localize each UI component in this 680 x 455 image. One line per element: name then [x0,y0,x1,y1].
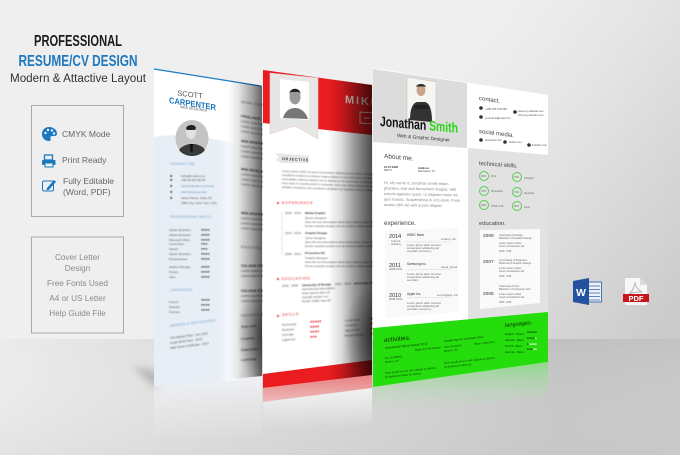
activities block: Proin iaculis arcu in nisl volutpat et ultricies [444,356,496,365]
contact block: +158 785 678 568 [485,107,507,111]
sidebar text: ●●● [201,242,208,246]
education text: Bachelor of Graphic Design [499,236,532,240]
experience text: 2008-2010 [389,297,403,301]
experience section [277,201,381,268]
sidebar text: hello@email.com [181,174,205,178]
experience section: Here the text description area lorem ipsum dolor sit amet [305,260,381,264]
photo: scott [176,120,208,156]
sidebar text: ● [170,183,173,188]
experience text: sed diam nonummy [407,307,432,311]
education text: Amet consectetur elit [499,269,524,273]
experience section: Junior Designer [305,236,326,240]
skills section: Illustrator [282,327,294,332]
education text: 2009 [483,233,494,239]
right column text: PERSONAL SKILLS [241,312,273,318]
technical skills: 75% [514,176,520,179]
experience text: consectetur adipiscing elit [407,304,439,308]
reflection: documents [132,362,548,440]
about section: Address [418,166,430,170]
sidebar text: 2550 City, New York, USA [181,201,218,205]
sidebar text: /www.linkedin.com/scott [181,184,214,188]
technical skills: technical skills. [479,161,518,170]
panel: extras [32,237,124,333]
activities block: Paper Craft Drive [474,340,495,346]
right column text: Lorem ipsum dolor [241,221,268,227]
right column text [241,100,279,362]
about section: Hi, My name is Jonathan Smith etiam [384,180,448,186]
technical skills: 60% [481,204,487,207]
about section [384,153,460,208]
icon: pdf: PDF [628,294,644,303]
skills section: Lightroom [282,337,296,342]
sidebar text: Sketch [169,247,179,251]
education text: Bachelor of Computer Arts [499,287,531,291]
objective text [282,169,390,193]
experience section: Graphic Designer [305,256,328,260]
skills section: Photoshop [282,322,297,327]
activities block: Leadership for volunteer 2015 [444,335,484,343]
sidebar text: Great Work Prize - 2015 [170,337,202,345]
skills section: ●●●●● [370,326,381,331]
name block [169,88,216,113]
activities block: activities. [384,335,411,344]
sidebar text: PROFESSIONAL SKILLS [170,215,212,219]
education section: suscipit semper orci [302,294,329,299]
sidebar text: LANGUAGES [170,288,193,292]
activities block: Boston, US [444,348,458,353]
education text [483,233,532,304]
sidebar text: Microsoft Office [169,238,190,242]
shadow on blue page [232,82,262,379]
sidebar text: AWARDS & CERTIFICATES [170,318,216,328]
activities block: mi eleifend at tellus vel ultrices [385,371,422,379]
sidebar text: Spanish [169,305,180,309]
experience text: Seoul, Korea [441,265,458,269]
experience text: 2010 [389,293,401,299]
sidebar text: ● [170,189,173,194]
photo: mike [280,79,309,120]
experience section: Here the text description area lorem ipsum dolor sit amet [305,220,381,224]
sidebar text: Adobe Illustrator [169,233,191,237]
blue top line [154,69,261,86]
text: extras list: Free Fonts Used [47,279,108,288]
languages block: ●●●●● [527,336,537,340]
experience section: Senior Designer [305,216,327,220]
education text: Amet consectetur elit [499,295,524,299]
sidebar text: Java [169,275,176,279]
technical skills: Corel [524,206,530,209]
activities block: Boston, US [385,359,399,364]
sidebar text: ● [170,173,173,178]
name: mike: MIKE [345,94,380,109]
languages block: German - Basic [505,350,524,354]
right column text: Lorem ipsum dolor sit [241,226,272,232]
education heading: education. [479,221,506,227]
contact block: www.my-website.com [518,109,545,113]
about section: Manhattan, NY [418,169,436,173]
technical skills: Print [491,175,496,178]
right column text: Lorem ipsum dolor [241,124,268,132]
languages block: ●●●●● [527,330,537,334]
sidebar text: ● [170,195,173,200]
experience text: 2014 [389,234,401,240]
sidebar text [169,162,218,350]
sidebar text: ●●●● [201,298,210,302]
sidebar text: High Honor Certificate - 2014 [170,341,209,350]
role: Web & Graphic Designer [397,133,450,144]
education text: Amet consectetur elit [499,244,524,248]
label: fully editable: Fully Editable [63,176,114,186]
experience heading: experience. [384,220,416,227]
right column text: Lorem ipsum dolor [241,299,268,303]
contact block: social media. [479,129,514,139]
gray right column [468,148,548,328]
right column text: COLLEGE STUDIES [241,264,271,268]
label: word pdf: (Word, PDF) [63,187,111,197]
sidebar text: CONTACT ME [170,162,195,166]
education text: GPA: 3.90 [499,274,512,278]
name panel [373,69,467,148]
icon: palette [42,127,57,141]
sidebar text: Adobe Illustrator [169,228,191,232]
contact block [479,96,548,147]
sidebar text: ●●●● [201,265,210,269]
sidebar text: ●●●● [201,308,210,312]
experience text: working [391,242,401,246]
experience text: HSBC Bank [407,233,424,237]
background wall [0,0,680,339]
experience text: sed diam nonummy [407,249,432,253]
activities block: Vice President [444,343,461,349]
sidebar text: ●●●● [201,257,210,261]
technical skills: Illustrator [524,192,534,195]
education text: Lorem ipsum dolor [499,241,521,245]
languages block [505,320,537,354]
experience text: 2011 [389,263,401,269]
education text: Art College of Business [499,258,528,262]
icon: edit [42,180,56,191]
photo: jonathan [407,77,436,122]
skills section: Leadership [345,318,360,323]
activities block [384,334,496,379]
education section: University of [354,281,372,285]
sidebar text: French [169,300,179,304]
skills section: ●●●● [310,324,319,329]
skills section: ●●●●● [370,316,381,321]
right column text: Lorem ipsum dolor [241,274,268,278]
title box [360,112,375,124]
experience section: Donec suscipit semper orci at porttitor mattis cras elit [305,264,376,268]
sidebar text: Python [169,270,179,274]
skills section [277,312,381,342]
icon: word [573,278,602,305]
about section: BIRTH [384,168,392,172]
red footer band [263,360,372,388]
languages block: Spanish - Basic [505,338,524,342]
right column text: FREELANCE [241,114,261,121]
label: cmyk mode: CMYK Mode [62,129,110,139]
right column text: Lorem ipsum dolor sit [241,216,272,222]
right column text: EDUCATION [241,245,262,250]
subtitle: Modern & Attactive Layout [10,73,147,85]
right column text: WEB DESIGNER [241,139,267,146]
heading [10,33,147,85]
technical skills: 70% [514,191,520,194]
experience text: Lorem ipsum dolor sit amet [407,272,441,276]
contact block: yourname@mail.com [485,116,511,120]
text: extras list: A4 or US Letter [49,294,106,303]
technical skills: 80% [514,205,520,208]
languages block: English - Fluent [505,332,524,336]
experience text: Samsung Inc. [407,262,427,266]
skills section: ●●●●● [310,319,321,324]
experience section: Promotion Kit [305,251,325,255]
education card [480,229,540,309]
document: red resume [263,70,373,388]
right column text: Lorem ipsum dolor [241,149,268,156]
sidebar text: German [169,310,180,314]
experience text: Lorem ipsum dolor sit amet [407,243,441,247]
education section: Here the text description [302,286,335,291]
experience text: Current [391,239,401,243]
technical skills: InDesign [524,177,534,180]
green footer band [373,312,548,387]
sidebar text: ●●●● [201,252,210,256]
skills section: ●●● [310,335,317,339]
sidebar text: ● [170,177,173,182]
about section: avada nibh vel velit auctor aliquet. [384,202,443,208]
right column text: WORK EXPERIENCE [241,100,279,110]
sidebar text: Street Name, Suite 28 [181,196,212,200]
skills section: ●●●●● [370,321,381,326]
right column text: Lorem ipsum dolor sit [241,294,272,298]
technical skills [479,161,534,210]
experience section: Donec suscipit semper orci at porttitor mattis cras elit [305,224,376,228]
document: blue resume [154,68,263,387]
panel: features [32,106,124,216]
sidebar text: ●●●● [201,238,210,242]
sidebar text: ●●●● [201,228,210,232]
experience section: 2009 - 2013 [285,252,301,256]
right column text: WEB DEVELOPER [241,167,270,175]
about section: quis massa. Suspendisse in orci enim. Proin [384,197,460,203]
experience section: EXPERIENCE [282,201,313,205]
text: extras list [47,253,108,318]
name: jonathan smith: Jonathan Smith [380,113,458,136]
sidebar text: Corel Draw [169,242,185,246]
right column text: Creativity [241,336,255,341]
education section: 2001 - 2005 [335,282,351,286]
text: extras list: Help Guide File [49,309,106,318]
education section: 2005 - 2008 [282,283,298,288]
experience text: consectetur adipiscing elit [407,246,439,250]
objective tag: OBJECTIVE [282,157,309,162]
technical skills: Photoshop [491,190,504,193]
skills section: Agreement [345,328,360,333]
education section: Donec mattis cras elit [302,298,331,303]
icon: word: W [576,287,586,299]
technical skills: 70% [481,190,487,193]
sidebar text: The Market Prize - Nov 2017 [170,331,209,340]
sidebar text: ●●●● [201,303,210,307]
red header band [263,70,372,135]
title: resume cv design: RESUME/CV DESIGN [18,53,138,70]
right column text: Team work [241,324,257,329]
experience text: Lorem ipsum dolor sit amet [407,301,441,305]
background floor [0,339,680,455]
skills section: Responsibility [345,332,364,338]
technical skills: HTML CSS [491,205,504,208]
education text: Lorem ipsum dolor [499,266,521,270]
skills section: ●●●● [310,329,319,334]
contact block: linkedin.com [532,143,548,147]
objective text: Incididunt ut labore et dolore magna aliqua ut enim ad minim veniam quis nostrud [282,173,390,181]
sidebar text: Dreamweaver [169,257,188,261]
sidebar text: Adobe Illustrator [169,252,191,256]
about section: 15.07.1992 [384,165,398,169]
contact block: facebook.com [485,138,502,142]
education text: 2005 [483,291,494,297]
experience card [385,228,458,318]
about section: pharetra, erat sed fermentum feugiat, velit [384,186,457,192]
contact block: http://my.domain.com [518,113,544,117]
skills section: ●●● [370,331,377,336]
contact block: twitter.com [509,140,523,144]
about section: mauris egestas quam, ut aliquam mass nis [384,191,458,197]
objective tag [275,153,309,163]
education section: EDUCATION [282,277,310,281]
experience section: 2015 - 2016 [285,211,301,215]
education text: GPA: 3.95 [499,249,512,253]
contact block: contact. [479,96,500,105]
education section [277,277,372,304]
text: extras list: Cover Letter [55,253,100,262]
experience text: consectetur adipiscing elit [407,275,439,279]
sidebar text: http://www.my.com [181,190,207,194]
title: professional: PROFESSIONAL [34,33,122,50]
activities block: Proin iaculis arcu in nisl volutpat et ultricies [385,366,437,375]
objective text: Lorem ipsum dolor sit amet consectetur adipiscing elit sed do eiusmod tempor [282,169,386,177]
icon: printer [42,155,56,167]
experience section: Donec suscipit semper orci at porttitor mattis cras elit [305,244,376,248]
right column text: Lorem ipsum dolor [241,177,268,184]
sidebar text: ●●● [201,247,208,251]
ribbon with photo [270,73,318,139]
right column text: WEB DESIGNER [241,211,267,217]
skills section: SKILLS [282,312,299,317]
about section: About me. [384,153,414,163]
education text: Diploma of Graphic Design [499,261,532,265]
experience text [389,233,458,311]
sidebar text: +88 28 221 68 26 [181,178,205,182]
shadow on red page [331,80,372,380]
sidebar text: ●●●● [201,270,210,274]
objective text: pariatur excepteur sint occaecat cupidatat non proident sunt in culpa qui officia [282,185,386,193]
text: extras list: Design [65,264,91,273]
education section: lorem ipsum dolor sit [302,290,330,295]
right column text: COLLEGE STUDIES [241,289,271,293]
right column text: Lorem ipsum dolor sit [241,182,272,190]
document: green resume [373,68,548,387]
activities block: No. 22 Atlantic [385,354,403,360]
education text: 2007 [483,259,494,265]
experience section: Media Graphic [305,211,326,215]
right column text: Lorem ipsum dolor sit [241,154,272,162]
skills section: InDesign [282,332,294,337]
experience text: Apple Inc. [407,292,421,296]
education text: University of Design [499,233,523,237]
objective text: exercitation ullamco laboris nisi ut aliquip ex ea commodo consequat duis aute [282,177,387,185]
languages block: ●●●●● [527,342,537,346]
activities block: Paper & Craft Design [415,345,441,352]
name block: SCOTT [177,88,203,101]
experience text: sed diam [407,278,419,282]
sidebar text: ●●●● [201,275,210,279]
languages block: languages. [505,320,533,329]
name block: CARPENTER [169,95,216,112]
name block: WEB DESIGNER [180,105,208,113]
right column text: Lorem ipsum dolor sit [241,144,272,152]
experience section: Here the text description area lorem ipsum dolor sit amet [305,240,381,244]
right column text: Organization [241,347,259,352]
education text: GPA: 3.85 [499,300,512,304]
education section: University of Design [302,282,331,287]
sidebar text: ●●●● [201,233,210,237]
experience section: 2013 - 2015 [285,231,301,235]
education text: University of Arts [499,284,520,288]
languages block: French - Basic [505,344,523,348]
right column text: Lorem ipsum dolor sit [241,269,272,273]
experience text: London, UK [441,237,456,241]
skills section: Creativity [345,323,358,328]
title box: DES [364,116,370,120]
icon: pdf [623,278,649,305]
blue sidebar band [154,135,236,387]
experience section: Graphic Design [305,231,327,235]
activities block: Wonderwall Talent Awards 2016 [385,342,428,350]
objective text: irure dolor in reprehenderit in voluptate velit esse cillum dolore eu fugiat nulla [282,181,384,189]
education text: Lorem ipsum dolor [499,292,521,296]
experience text: 2008-2011 [389,267,403,271]
activities block: mi eleifend at tellus vel [444,362,472,369]
right column text: Lorem ipsum dolor sit [241,172,272,180]
technical skills: 90% [481,175,487,178]
sidebar text: Adobe InDesign [169,265,191,269]
label: print ready: Print Ready [62,155,107,165]
right column text: Leadership [241,357,257,362]
experience text: Los Angeles, CA [437,293,458,297]
right column text: Lorem ipsum dolor sit [241,119,272,128]
right column text: Lorem ipsum dolor sit [241,129,272,138]
languages block: ●●●●● [527,347,537,351]
